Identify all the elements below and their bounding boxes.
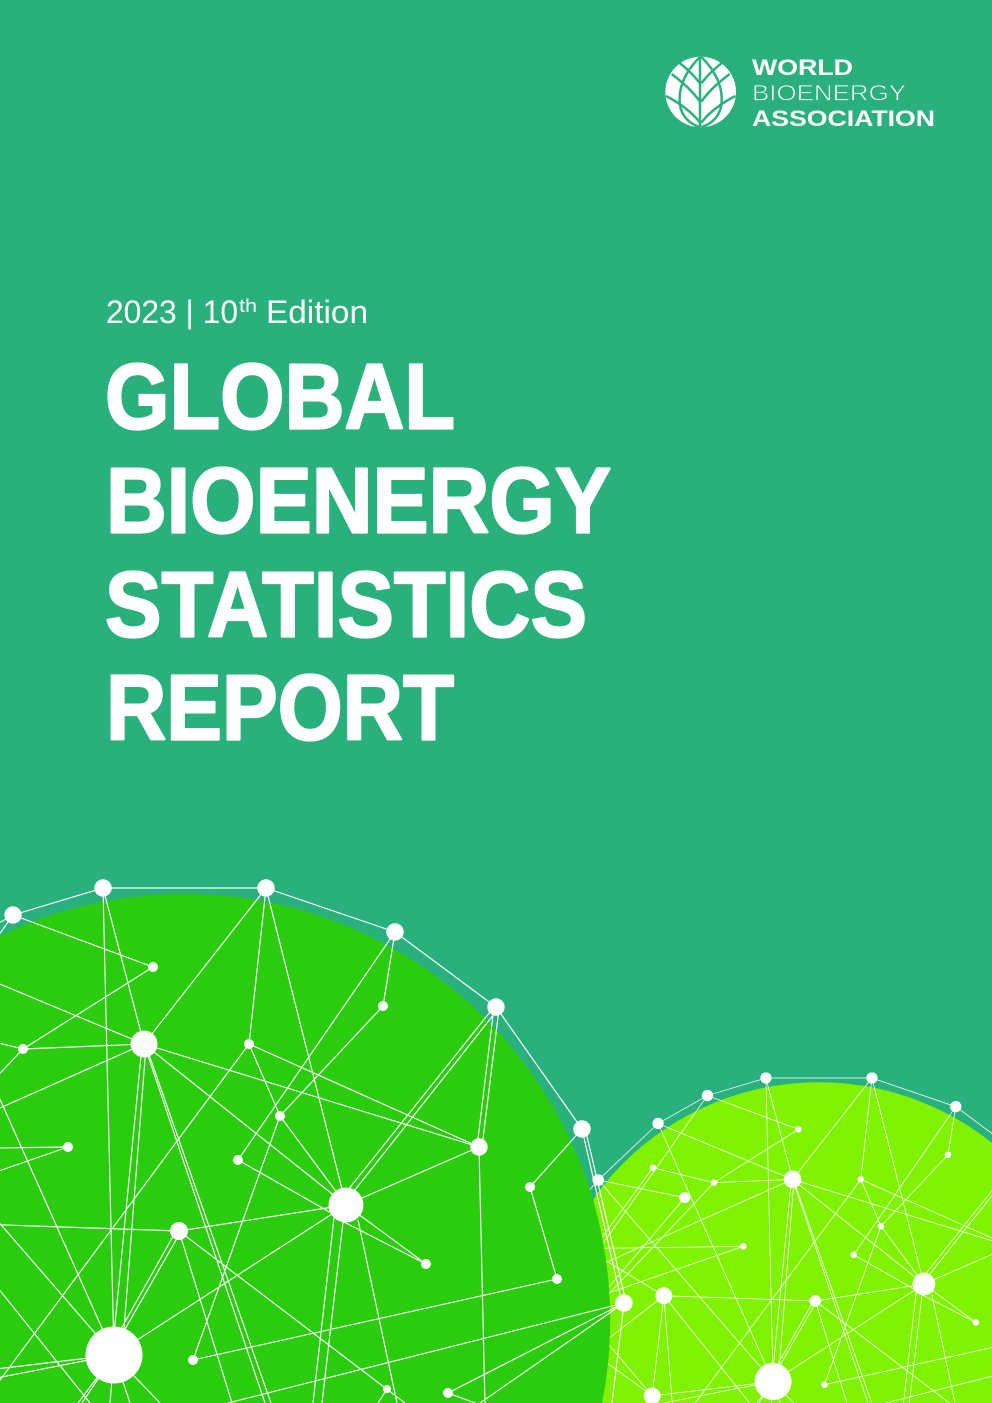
title line: STATISTICS: STATISTICS bbox=[105, 552, 587, 656]
edition line: 2023 | 10 bbox=[106, 294, 238, 330]
circle: dark green left bbox=[0, 894, 610, 1403]
title bbox=[105, 344, 611, 760]
title line: BIOENERGY: BIOENERGY bbox=[106, 448, 611, 552]
edition line: th bbox=[239, 296, 257, 316]
title line: GLOBAL: GLOBAL bbox=[105, 344, 455, 448]
circle: lime green right bbox=[578, 1082, 992, 1403]
logo: World Bioenergy Association bbox=[665, 55, 935, 131]
network: right node graph bbox=[569, 1072, 992, 1403]
icon: leaf globe bbox=[665, 57, 736, 127]
edition line bbox=[106, 294, 368, 330]
title line: REPORT: REPORT bbox=[106, 656, 454, 760]
edition line: Edition bbox=[266, 294, 368, 330]
logo text: ASSOCIATION: ASSOCIATION bbox=[752, 106, 935, 131]
network: left node graph bbox=[0, 879, 633, 1403]
logo text: BIOENERGY: BIOENERGY bbox=[752, 80, 906, 106]
logo text: WORLD: WORLD bbox=[752, 55, 853, 80]
